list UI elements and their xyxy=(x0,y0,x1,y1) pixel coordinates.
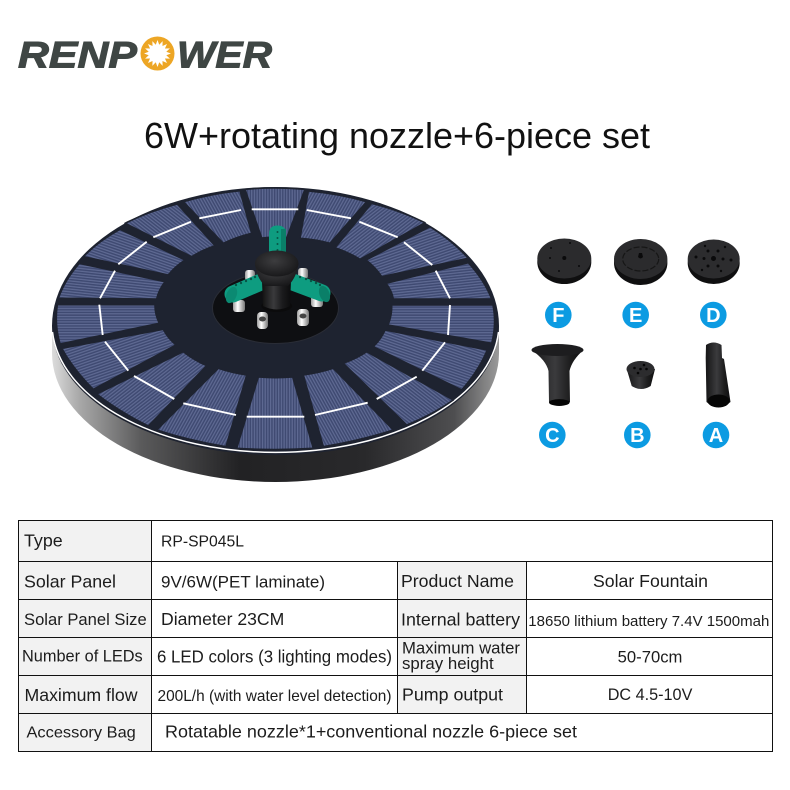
teal nozzle arms xyxy=(224,226,332,305)
row: type: RP-SP045L xyxy=(161,534,244,551)
row: solar panel / product name: 9V/6W(PET laminate) xyxy=(161,572,325,592)
icon: orange sun in logo xyxy=(140,36,174,70)
part B badge xyxy=(624,422,651,448)
title: 6W+rotating nozzle+6-piece set xyxy=(144,115,650,156)
solar cell panels xyxy=(56,188,495,450)
part C: funnel nozzle xyxy=(532,344,584,406)
part D badge: D xyxy=(706,305,721,327)
row: LEDs / spray height: Number of LEDs xyxy=(22,648,143,666)
part C badge: C xyxy=(545,425,560,447)
part E badge xyxy=(622,302,649,328)
row: solar panel / product name: Product Name xyxy=(401,571,514,591)
row: accessory bag: Accessory Bag xyxy=(26,724,136,742)
row: accessory bag: Rotatable nozzle*1+conventional nozzle 6-piece set xyxy=(165,722,577,742)
row: solar panel / product name: Solar Panel xyxy=(24,572,116,592)
row: LEDs / spray height: spray height xyxy=(402,655,494,673)
specification table xyxy=(18,520,772,752)
row: type: Type xyxy=(24,531,63,551)
row: flow / pump output: Maximum flow xyxy=(24,685,138,705)
disc top face xyxy=(52,187,499,455)
row: flow / pump output xyxy=(24,684,692,705)
LED lights xyxy=(233,268,323,329)
white busbar lines across cells xyxy=(99,209,450,417)
part A badge xyxy=(703,422,729,448)
part F: flat disc xyxy=(537,238,591,284)
table grid xyxy=(18,520,772,752)
part C badge xyxy=(539,422,566,448)
part E: disc with centre spout xyxy=(614,239,667,285)
solar fountain disc xyxy=(52,187,499,482)
row: panel size / battery: Diameter 23CM xyxy=(161,609,284,629)
row: panel size / battery: Internal battery xyxy=(401,610,520,630)
centre hub plate xyxy=(212,272,338,344)
row: flow / pump output: DC 4.5-10V xyxy=(608,686,692,704)
part D: disc with many holes xyxy=(688,240,740,284)
part D badge xyxy=(700,302,727,328)
row: LEDs / spray height xyxy=(22,639,682,673)
row: LEDs / spray height: 50-70cm xyxy=(618,648,682,666)
logo text: REN P: RENP xyxy=(18,34,137,76)
part A badge: A xyxy=(709,425,723,447)
logo: RENPOWER xyxy=(18,34,272,76)
row: panel size / battery: 18650 lithium battery 7.4V 1500mah xyxy=(528,613,769,630)
part F badge xyxy=(545,302,572,328)
row: solar panel / product name xyxy=(24,571,708,592)
logo text: WER: WER xyxy=(177,34,272,76)
row: panel size / battery: Solar Panel Size xyxy=(24,610,147,629)
disc side wall xyxy=(52,326,499,482)
part F badge: F xyxy=(552,305,564,327)
row: panel size / battery xyxy=(24,609,769,630)
label cell shading xyxy=(19,521,526,751)
part A: stepped tube xyxy=(706,342,730,408)
row: LEDs / spray height: 6 LED colors (3 lighting modes) xyxy=(157,646,392,666)
part B badge: B xyxy=(630,425,645,447)
accessory parts xyxy=(532,238,740,448)
white rim highlight xyxy=(52,332,498,452)
part B: small sprinkler head xyxy=(626,361,655,389)
part E badge: E xyxy=(629,305,642,327)
black central nozzle xyxy=(255,250,298,312)
row: type xyxy=(24,531,244,551)
row: LEDs / spray height: Maximum water xyxy=(402,639,521,657)
row: flow / pump output: 200L/h (with water level detection) xyxy=(158,688,392,705)
row: flow / pump output: Pump output xyxy=(402,684,503,704)
row: solar panel / product name: Solar Fountain xyxy=(593,571,708,591)
